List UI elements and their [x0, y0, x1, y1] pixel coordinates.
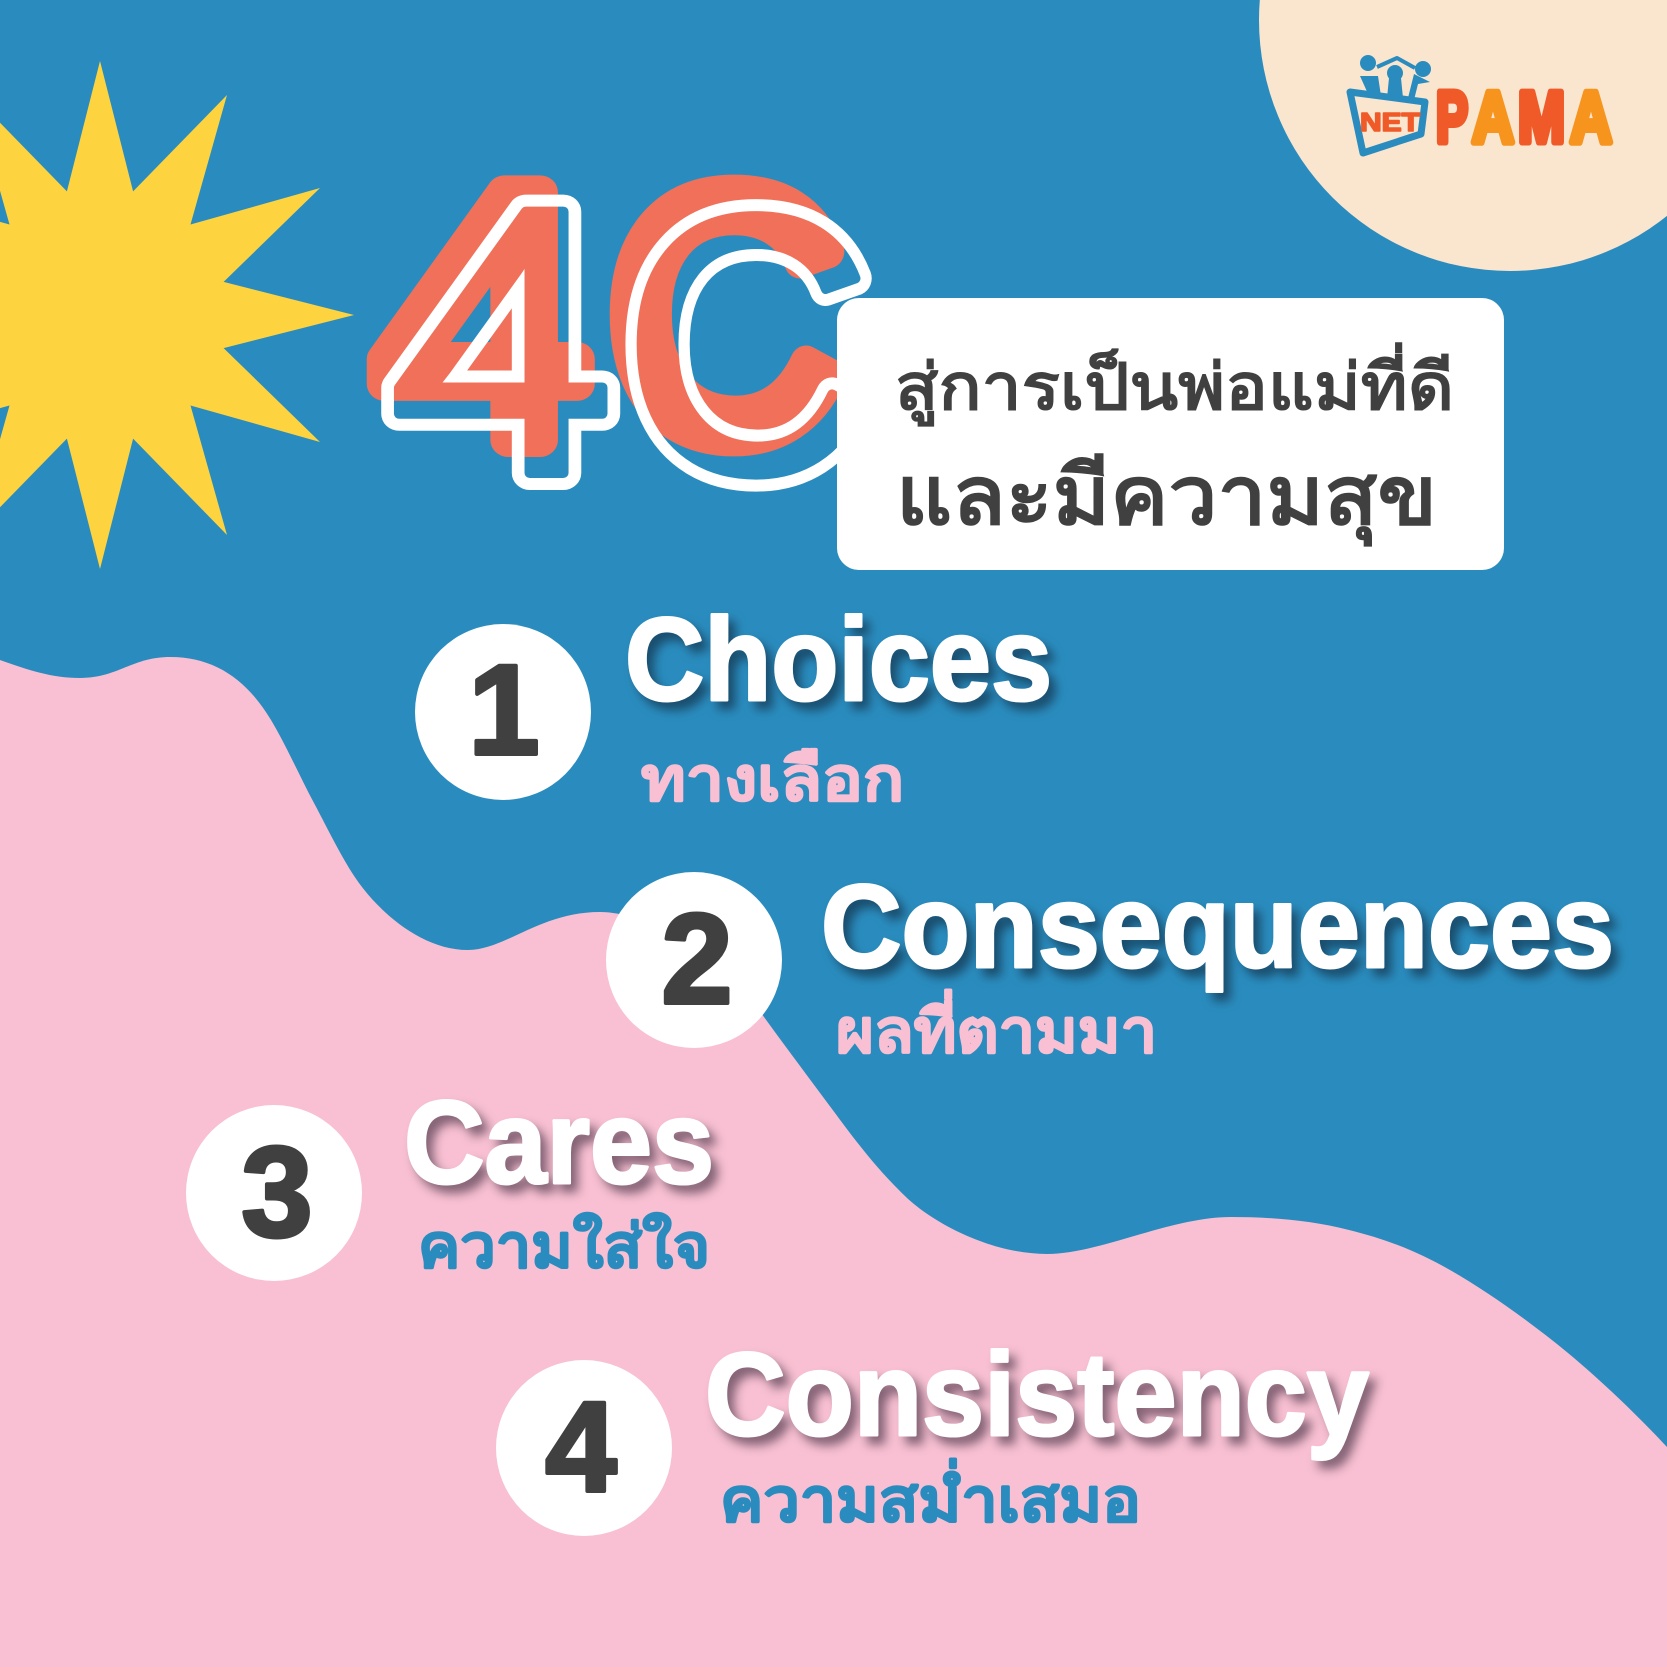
item 1: Choices [415, 594, 1052, 813]
Thai label: consistency: ความสม่ำเสมอ [720, 1458, 1141, 1534]
Thai label: choices: ทางเลือก [641, 746, 904, 813]
number badge 2 [606, 872, 782, 1048]
item 3: Cares [186, 1077, 714, 1281]
logo wordmark: PAMA: A [1570, 78, 1612, 158]
subtitle line 1: สู่การเป็นพ่อแม่ที่ดี [895, 342, 1454, 427]
heading: Choices: Choices [625, 594, 1052, 726]
title shadow: coral 4C: C [609, 120, 843, 511]
number badge 1: 1 [468, 639, 540, 782]
number badge 4: 4 [545, 1376, 617, 1519]
number badge 2: 2 [661, 888, 733, 1031]
subtitle line 2: และมีความสุข [896, 451, 1437, 547]
logo icon: basket with family [1350, 55, 1431, 153]
logo wordmark: PAMA: M [1518, 78, 1565, 158]
logo wordmark: PAMA [1436, 78, 1612, 158]
heading: Consistency: Consistency [705, 1329, 1369, 1461]
number badge 4 [496, 1360, 672, 1536]
subtitle panel [837, 298, 1504, 570]
number badge 3 [186, 1105, 362, 1281]
logo icon: basket with family: NET [1360, 107, 1420, 137]
heading: Consequences: Consequences [821, 861, 1614, 993]
cream corner circle [1259, 0, 1667, 271]
Thai label: consequences: ผลที่ตามมา [836, 989, 1157, 1065]
logo wordmark: PAMA: A [1472, 78, 1514, 158]
logo wordmark: PAMA: P [1436, 78, 1468, 158]
title outline: white 4C [381, 194, 872, 492]
number badge 1 [415, 624, 591, 800]
item 2: Consequences [606, 861, 1614, 1065]
background: pink wave [0, 657, 1667, 1667]
title: 4C [366, 174, 872, 492]
title shadow: coral 4C [376, 115, 843, 517]
number badge 3: 3 [241, 1121, 313, 1264]
heading: Cares: Cares [404, 1077, 714, 1209]
logo: NetPama [1350, 55, 1612, 158]
icon: yellow sun [0, 61, 354, 569]
Thai label: cares: ความใส่ใจ [418, 1212, 710, 1280]
item 4: Consistency [496, 1329, 1369, 1536]
title shadow: coral 4C: 4 [376, 115, 588, 517]
